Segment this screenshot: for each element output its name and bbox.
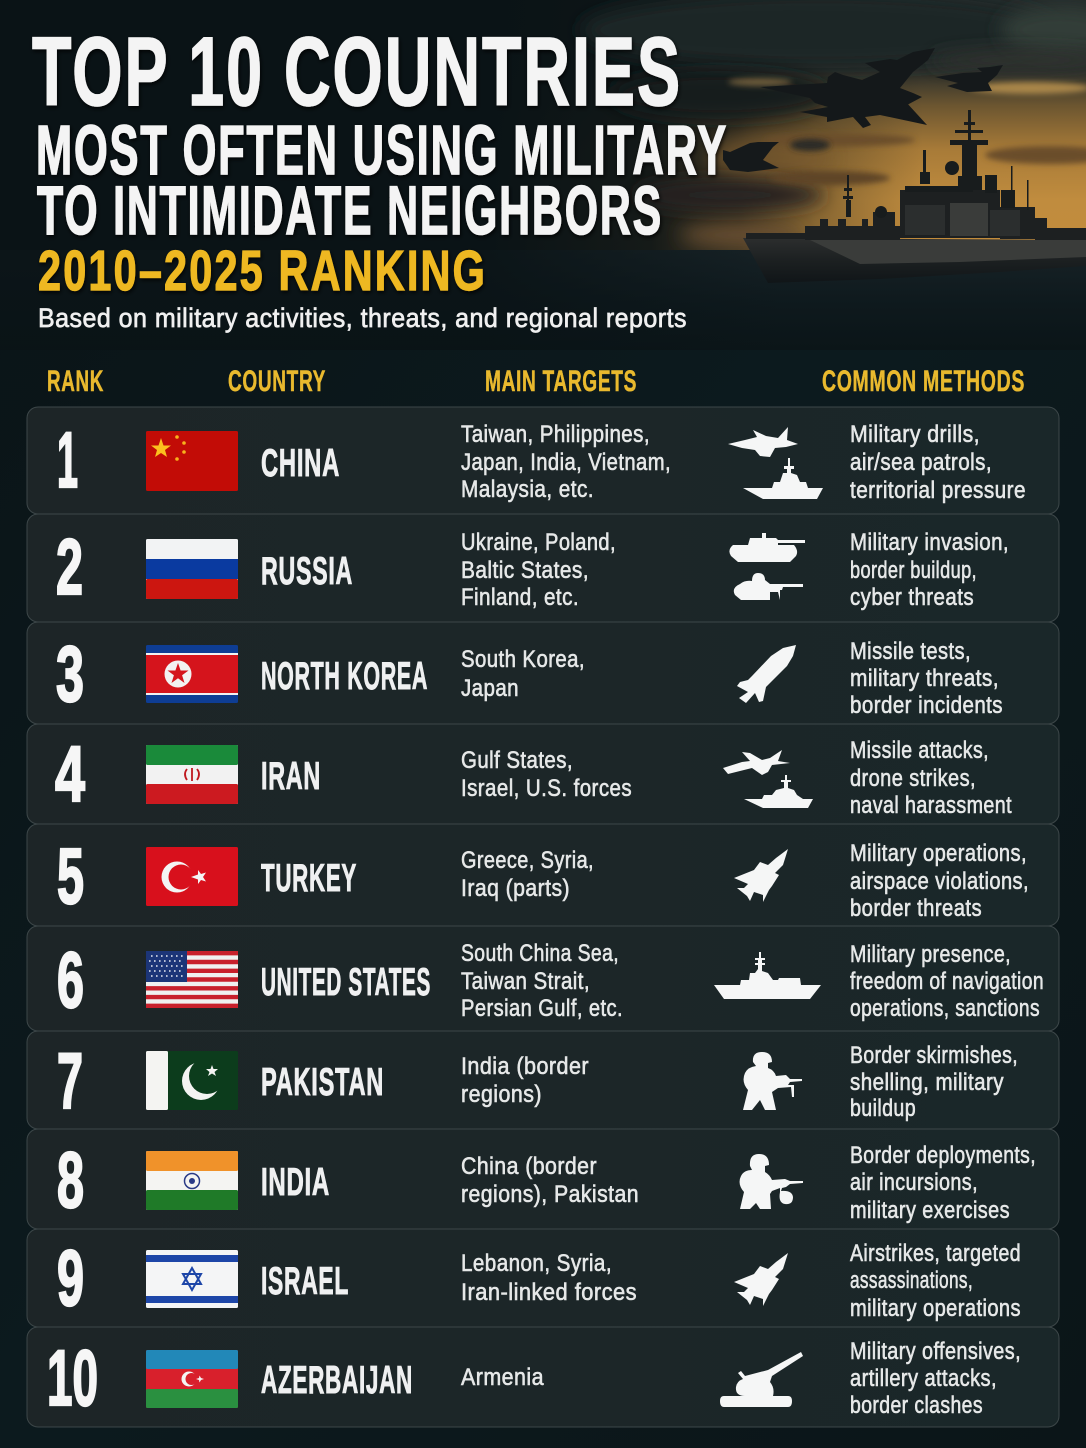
subtitle: date range: 2010–2025 RANKING [38, 239, 487, 303]
icon: jet and warship [728, 427, 823, 499]
row 9: Israel: assassinations, [850, 1267, 973, 1294]
row 6: United States: South China Sea, [461, 940, 619, 967]
row 3: North Korea: border incidents [850, 692, 1003, 719]
flag: Israel [146, 1250, 238, 1308]
row 2: Russia: Baltic States, [461, 557, 589, 584]
row 1: China [27, 407, 1059, 514]
row 2: Russia: Ukraine, Poland, [461, 529, 616, 556]
row 7: Pakistan: India (border [461, 1053, 589, 1080]
row 2: Russia: cyber threats [850, 584, 974, 611]
row 7: Pakistan: shelling, military [850, 1069, 1004, 1096]
flag: Pakistan [146, 1051, 238, 1110]
row 9: Israel: Iran-linked forces [461, 1279, 637, 1306]
row 8: India: air incursions, [850, 1169, 978, 1196]
row 2: Russia: border buildup, [850, 557, 977, 584]
row 4: Iran: IRAN [261, 755, 321, 798]
row 6: United States: 6 [57, 935, 84, 1024]
title line 3: TO INTIMIDATE NEIGHBORS [37, 172, 663, 249]
flag: Iran [146, 745, 238, 804]
row 1: China: Japan, India, Vietnam, [461, 449, 671, 476]
icon: soldier with machine gun [740, 1154, 803, 1209]
icon: tank and prone soldier [729, 533, 805, 600]
row 7: Pakistan: PAKISTAN [261, 1061, 384, 1104]
row 2: Russia: RUSSIA [261, 550, 353, 593]
row 1: China: 1 [57, 415, 78, 504]
flag: Russia [146, 539, 238, 599]
flag: North Korea [146, 645, 238, 703]
row 2: Russia [27, 514, 1059, 622]
row 9: Israel: Airstrikes, targeted [850, 1240, 1021, 1267]
row 8: India: China (border [461, 1153, 597, 1180]
row 7: Pakistan: Border skirmishes, [850, 1042, 1018, 1069]
row 6: United States [27, 926, 1059, 1031]
row 8: India: 8 [57, 1135, 84, 1224]
row 3: North Korea: 3 [56, 629, 84, 718]
row 4: Iran: 4 [55, 729, 85, 818]
row 3: North Korea: military threats, [850, 665, 999, 692]
row 1: China: air/sea patrols, [850, 449, 992, 476]
row 5: Turkey [27, 824, 1059, 926]
row 3: North Korea: NORTH KOREA [261, 655, 428, 698]
row 8: India: Border deployments, [850, 1142, 1036, 1169]
row 6: United States: Taiwan Strait, [461, 968, 590, 995]
row 4: Iran: Gulf States, [461, 747, 573, 774]
row 4: Iran: Missile attacks, [850, 737, 989, 764]
row 8: India: regions), Pakistan [461, 1181, 639, 1208]
row 6: United States: operations, sanctions [850, 995, 1040, 1022]
left darkening [0, 0, 1086, 250]
subtitle: basis: Based on military activities, threats, and regional reports [38, 303, 687, 333]
row 8: India [27, 1129, 1059, 1229]
row 3: North Korea [27, 622, 1059, 724]
flag: Turkey [146, 847, 238, 906]
row 6: United States: Persian Gulf, etc. [461, 995, 623, 1022]
row 5: Turkey: TURKEY [261, 857, 357, 900]
row 7: Pakistan: regions) [461, 1081, 542, 1108]
row 9: Israel [27, 1229, 1059, 1327]
row 2: Russia: Finland, etc. [461, 584, 579, 611]
table header: MAIN TARGETS [485, 365, 637, 398]
row 10: Azerbaijan [27, 1327, 1059, 1427]
row 5: Turkey: Iraq (parts) [461, 875, 570, 902]
row 10: Azerbaijan: 10 [47, 1333, 98, 1422]
row 9: Israel: Lebanon, Syria, [461, 1250, 612, 1277]
title [32, 17, 728, 303]
row 5: Turkey: Greece, Syria, [461, 847, 594, 874]
row 10: Azerbaijan: artillery attacks, [850, 1365, 997, 1392]
jet silhouette small left [723, 142, 779, 172]
title line 1: TOP 10 COUNTRIES [32, 17, 682, 126]
row 3: North Korea: South Korea, [461, 646, 585, 673]
row 4: Iran [27, 724, 1059, 824]
flag: India [146, 1151, 238, 1210]
icon: artillery gun [720, 1352, 803, 1407]
icon: fighter jet [734, 849, 788, 902]
row 8: India: military exercises [850, 1197, 1010, 1224]
row 4: Iran: Israel, U.S. forces [461, 775, 632, 802]
table header: COUNTRY [228, 365, 326, 398]
row 6: United States: UNITED STATES [261, 961, 431, 1004]
row 5: Turkey: airspace violations, [850, 868, 1029, 895]
row 1: China: Malaysia, etc. [461, 476, 594, 503]
clouds [580, 0, 1086, 245]
row 9: Israel: military operations [850, 1295, 1021, 1322]
row 7: Pakistan: 7 [57, 1036, 83, 1125]
row 3: North Korea: Missile tests, [850, 638, 971, 665]
icon: warship [714, 952, 821, 999]
row 10: Azerbaijan: AZERBAIJAN [261, 1359, 413, 1402]
jet silhouette large [760, 48, 935, 128]
flag: Azerbaijan [146, 1350, 238, 1408]
row 10: Azerbaijan: border clashes [850, 1392, 983, 1419]
row 2: Russia: Military invasion, [850, 529, 1009, 556]
sea [0, 250, 1086, 350]
row 10: Azerbaijan: Armenia [461, 1364, 544, 1391]
row 8: India: INDIA [261, 1161, 330, 1204]
row 6: United States: freedom of navigation [850, 968, 1044, 995]
icon: jet and warship [723, 750, 813, 808]
icon: soldier with rifle [743, 1052, 802, 1110]
row 1: China: CHINA [261, 442, 340, 485]
row 1: China: Military drills, [850, 421, 980, 448]
row 7: Pakistan [27, 1031, 1059, 1129]
row 5: Turkey: border threats [850, 895, 982, 922]
row 6: United States: Military presence, [850, 941, 1011, 968]
row 3: North Korea: Japan [461, 675, 519, 702]
row 10: Azerbaijan: Military offensives, [850, 1338, 1021, 1365]
row 7: Pakistan: buildup [850, 1095, 916, 1122]
flag: United States [146, 951, 238, 1008]
row 9: Israel: 9 [57, 1233, 84, 1322]
header photo: warships and jets at sunset [0, 0, 1086, 350]
row 5: Turkey: 5 [57, 831, 84, 920]
row 9: Israel: ISRAEL [261, 1260, 349, 1303]
row 2: Russia: 2 [56, 522, 83, 611]
row 4: Iran: drone strikes, [850, 765, 976, 792]
row 5: Turkey: Military operations, [850, 840, 1027, 867]
row 4: Iran: naval harassment [850, 792, 1012, 819]
row 1: China: Taiwan, Philippines, [461, 421, 650, 448]
icon: fighter jet [734, 1253, 788, 1306]
warship silhouette [743, 110, 1086, 283]
row 1: China: territorial pressure [850, 477, 1026, 504]
icon: missile [737, 645, 796, 703]
flag: China [146, 431, 238, 491]
table header [47, 365, 1025, 398]
table header: RANK [47, 365, 104, 398]
jet silhouette small right [935, 65, 1003, 92]
